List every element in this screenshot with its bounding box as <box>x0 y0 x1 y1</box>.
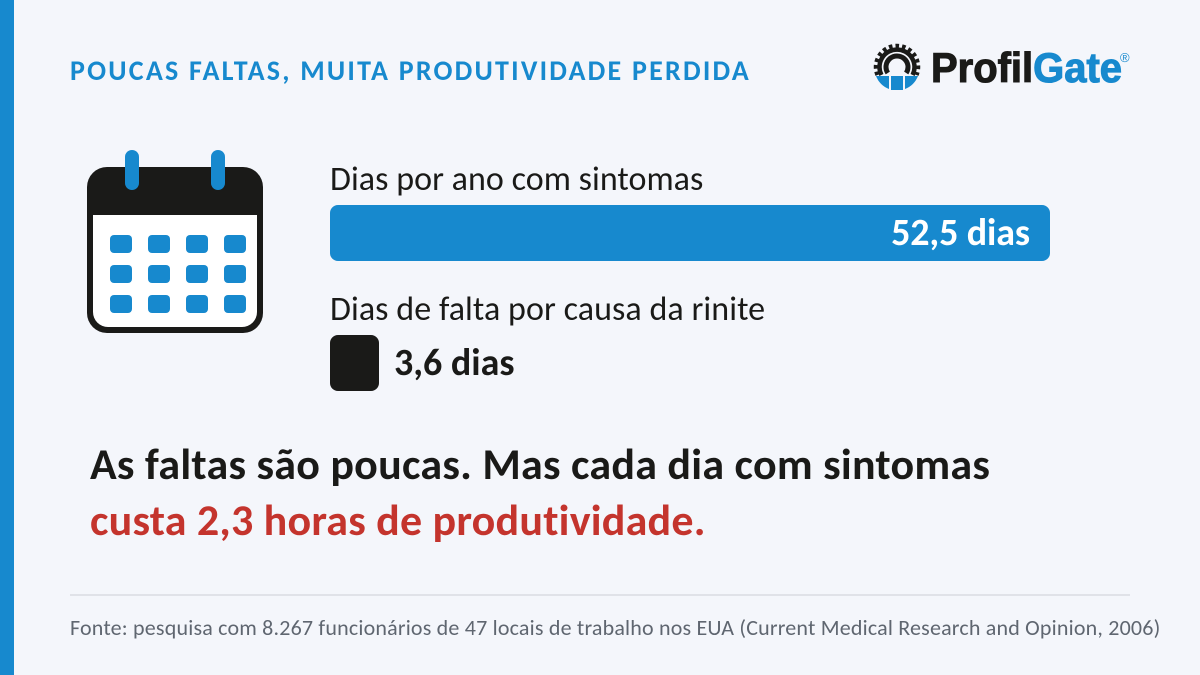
bar: symptom days <box>330 205 1050 261</box>
label: missed days: Dias de falta por causa da rinite <box>330 289 765 330</box>
headline conclusion: custa 2,3 horas de produtividade. <box>90 493 706 547</box>
registered mark: ® <box>1120 50 1130 65</box>
logo: ProfilGate <box>874 44 1130 91</box>
headline conclusion <box>90 437 990 547</box>
icon: calendar <box>87 150 263 333</box>
bar: missed days <box>330 335 379 391</box>
left accent bar <box>0 0 14 675</box>
label: symptom days: Dias por ano com sintomas <box>330 159 703 200</box>
divider <box>70 594 1130 596</box>
icon: gear <box>876 46 918 90</box>
headline conclusion: As faltas são poucas. Mas cada dia com sintomas <box>90 437 990 491</box>
source note: Fonte: pesquisa com 8.267 funcionários de 47 locais de trabalho nos EUA (Current Medical Research and Opinion, 2006) <box>70 614 1160 641</box>
bar: symptom days: 52,5 dias <box>891 210 1030 256</box>
value: missed days: 3,6 dias <box>394 340 515 386</box>
title: POUCAS FALTAS, MUITA PRODUTIVIDADE PERDIDA <box>70 53 751 88</box>
logo wordmark: ProfilGate <box>931 44 1122 91</box>
